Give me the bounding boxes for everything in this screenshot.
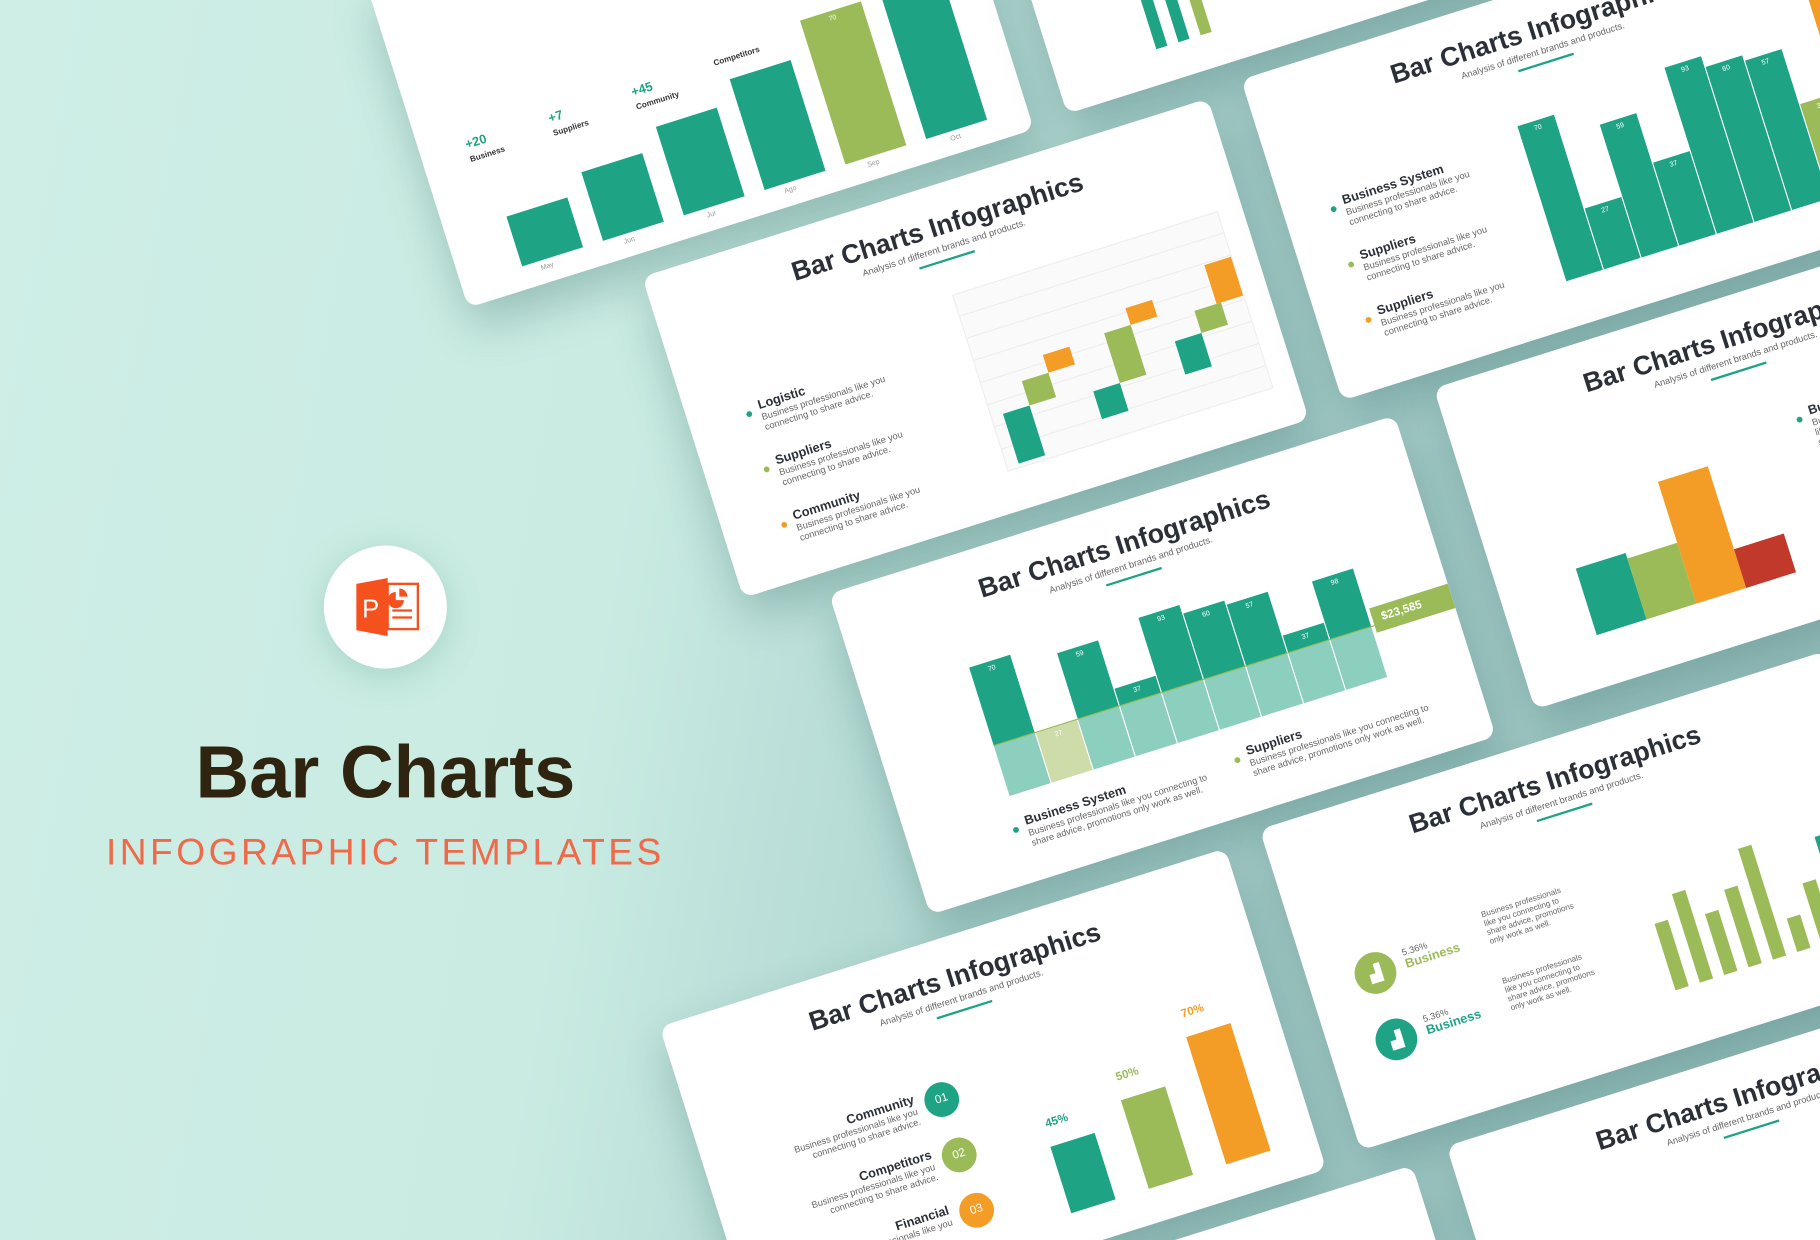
- legend numbered: Business professionals like you: [810, 1162, 937, 1211]
- price tag: $23,585: [1380, 599, 1424, 623]
- stats: share advice, promotions: [1507, 969, 1596, 1004]
- stats: 5.36%: [1421, 1007, 1450, 1024]
- stats: +45: [630, 80, 655, 100]
- legend: Business professionals like you: [1345, 169, 1471, 217]
- bars: 98: [1330, 578, 1340, 587]
- slide: bottom-left numbered: Analysis of different brands and products.: [878, 967, 1044, 1028]
- legend: Logistic: [756, 384, 807, 412]
- legend: connecting to share advice.: [1348, 183, 1459, 227]
- slide: top-right bars: [1241, 0, 1820, 401]
- slide: bottom right partial: [1447, 968, 1820, 1240]
- legend: share advice, promotions only work as well.: [1030, 784, 1204, 848]
- legend: connecting to share advice.: [1383, 294, 1494, 338]
- stats: only work as well.: [1510, 986, 1573, 1013]
- icon: powerpoint: P: [362, 595, 379, 623]
- legend: [1013, 702, 1430, 848]
- legend: Suppliers: [1358, 232, 1418, 263]
- stats: [1354, 887, 1596, 1060]
- slide: waterfall chart: Analysis of different brands and products.: [861, 217, 1027, 279]
- stats: Business: [469, 146, 506, 164]
- bars: [506, 0, 988, 272]
- price tag: [1369, 584, 1455, 633]
- legend: Business professionals like you: [760, 374, 887, 422]
- legend: Business professionals like you connecting to: [1027, 772, 1208, 838]
- legend numbered: Competitors: [857, 1149, 933, 1184]
- bars: 59: [1075, 650, 1085, 659]
- bars: 37: [1133, 686, 1142, 694]
- stats: like you connecting to: [1504, 964, 1581, 995]
- bars: 93: [1680, 65, 1690, 74]
- stats: Business: [1425, 1007, 1483, 1038]
- legend numbered: Financial: [894, 1204, 951, 1234]
- legend: Suppliers: [1244, 728, 1304, 758]
- bars: 60: [1722, 64, 1731, 73]
- bars: 37: [1301, 632, 1310, 641]
- legend numbered: connecting to share advice.: [811, 1116, 922, 1160]
- slide: right middle: Analysis of different brands and products.: [1653, 329, 1819, 390]
- slide: bottom partial: [846, 1165, 1513, 1240]
- bars: 70: [987, 664, 997, 673]
- legend: Business professionals like you: [778, 429, 904, 478]
- bars: May: [540, 262, 555, 272]
- legend: [1330, 162, 1506, 338]
- legend: [746, 374, 921, 543]
- bars: 70: [828, 14, 838, 23]
- bars: Jun: [623, 236, 636, 246]
- title: Bar Charts Infographics: [788, 166, 1087, 287]
- legend: connecting to share advice.: [1365, 239, 1476, 283]
- legend: connecting to share advice.: [763, 388, 874, 432]
- stats: Business professionals: [1501, 953, 1583, 986]
- bars: 27: [1054, 730, 1064, 739]
- bars: 37: [1669, 160, 1679, 169]
- bars: 93: [1157, 615, 1166, 624]
- bar chart: [1044, 1002, 1270, 1214]
- title: Bar Charts Infographics: [1405, 719, 1704, 839]
- stats: Competitors: [713, 46, 761, 68]
- stats: Business: [1404, 941, 1462, 971]
- legend: Business professionals like you: [795, 484, 921, 533]
- bar chart: 50%: [1114, 1065, 1140, 1084]
- bars: 57: [1761, 58, 1770, 67]
- bars: [1654, 835, 1820, 990]
- legend numbered: 03: [968, 1202, 985, 1218]
- legend: Suppliers: [1375, 287, 1435, 318]
- stats: +7: [547, 108, 565, 126]
- slide: center bar chart: Analysis of different brands and products.: [1048, 534, 1214, 596]
- legend numbered: [793, 1082, 994, 1240]
- stats: Business professionals: [1480, 887, 1562, 920]
- stats: 5.36%: [1400, 940, 1429, 958]
- title: Bar Charts: [195, 730, 575, 814]
- legend: Business professionals like you: [1380, 279, 1506, 328]
- stats: Suppliers: [552, 119, 590, 138]
- bars: 57: [1245, 601, 1254, 610]
- stats: share advice, promotions: [1486, 902, 1575, 937]
- legend: Suppliers: [774, 437, 833, 468]
- slide: bottom-left numbered: [660, 848, 1326, 1240]
- bars: [1518, 0, 1820, 282]
- legend numbered: connecting to share advice.: [829, 1172, 940, 1216]
- stats: only work as well.: [1489, 919, 1552, 946]
- slide: top-right bars: Analysis of different brands and products.: [1460, 20, 1626, 81]
- slide: right middle: [1434, 210, 1820, 709]
- legend: Business professionals like you: [1362, 224, 1488, 273]
- legend: connecting to share advice.: [781, 444, 892, 488]
- legend: [1796, 373, 1820, 448]
- stats: like you connecting to: [1483, 897, 1560, 929]
- legend: share advice, promotions only work as well.: [1252, 715, 1426, 778]
- slide: waterfall chart: [642, 99, 1309, 598]
- legend: Community: [791, 489, 862, 523]
- legend: connecting to share advice.: [798, 499, 909, 543]
- slide: right lower with icons: Analysis of different brands and products.: [1479, 770, 1644, 831]
- bars: [1140, 0, 1212, 50]
- bars: 59: [1616, 122, 1625, 131]
- title: Bar Charts Infographics: [805, 916, 1104, 1036]
- stats: [464, 46, 761, 164]
- bars: [969, 568, 1454, 796]
- bars: 27: [1601, 206, 1610, 215]
- bars: 60: [1201, 610, 1211, 619]
- bars: Oct: [950, 133, 962, 143]
- slide: center bar chart: [829, 415, 1496, 915]
- slide: top-left stats bars: [367, 0, 1034, 308]
- stats: ▟: [1388, 1029, 1405, 1050]
- legend numbered: Business professionals like you: [793, 1107, 919, 1155]
- stats: ▟: [1367, 962, 1384, 984]
- bars: Sep: [867, 159, 881, 169]
- bars: [1576, 466, 1796, 636]
- slide: top-middle partial: [966, 0, 1633, 114]
- legend: Business System: [1341, 162, 1446, 208]
- slide: right lower with icons: [1260, 651, 1820, 1150]
- subtitle: INFOGRAPHIC TEMPLATES: [106, 831, 665, 873]
- bar chart: 70%: [1180, 1002, 1206, 1021]
- bars: Jul: [706, 211, 717, 220]
- legend numbered: Community: [845, 1093, 916, 1128]
- legend: Business professionals like you connecting to: [1248, 702, 1430, 768]
- legend numbered: 02: [951, 1146, 967, 1162]
- bars: Ago: [784, 185, 798, 195]
- legend: Business System: [1023, 783, 1128, 828]
- title: Bar Charts Infographics: [975, 483, 1274, 603]
- legend numbered: 01: [934, 1091, 950, 1107]
- stats: +20: [464, 132, 489, 152]
- chart: [952, 211, 1274, 472]
- icon: powerpoint: [324, 546, 447, 669]
- stats: Community: [635, 91, 680, 112]
- bar chart: 45%: [1044, 1112, 1070, 1131]
- bars: 70: [1533, 124, 1543, 133]
